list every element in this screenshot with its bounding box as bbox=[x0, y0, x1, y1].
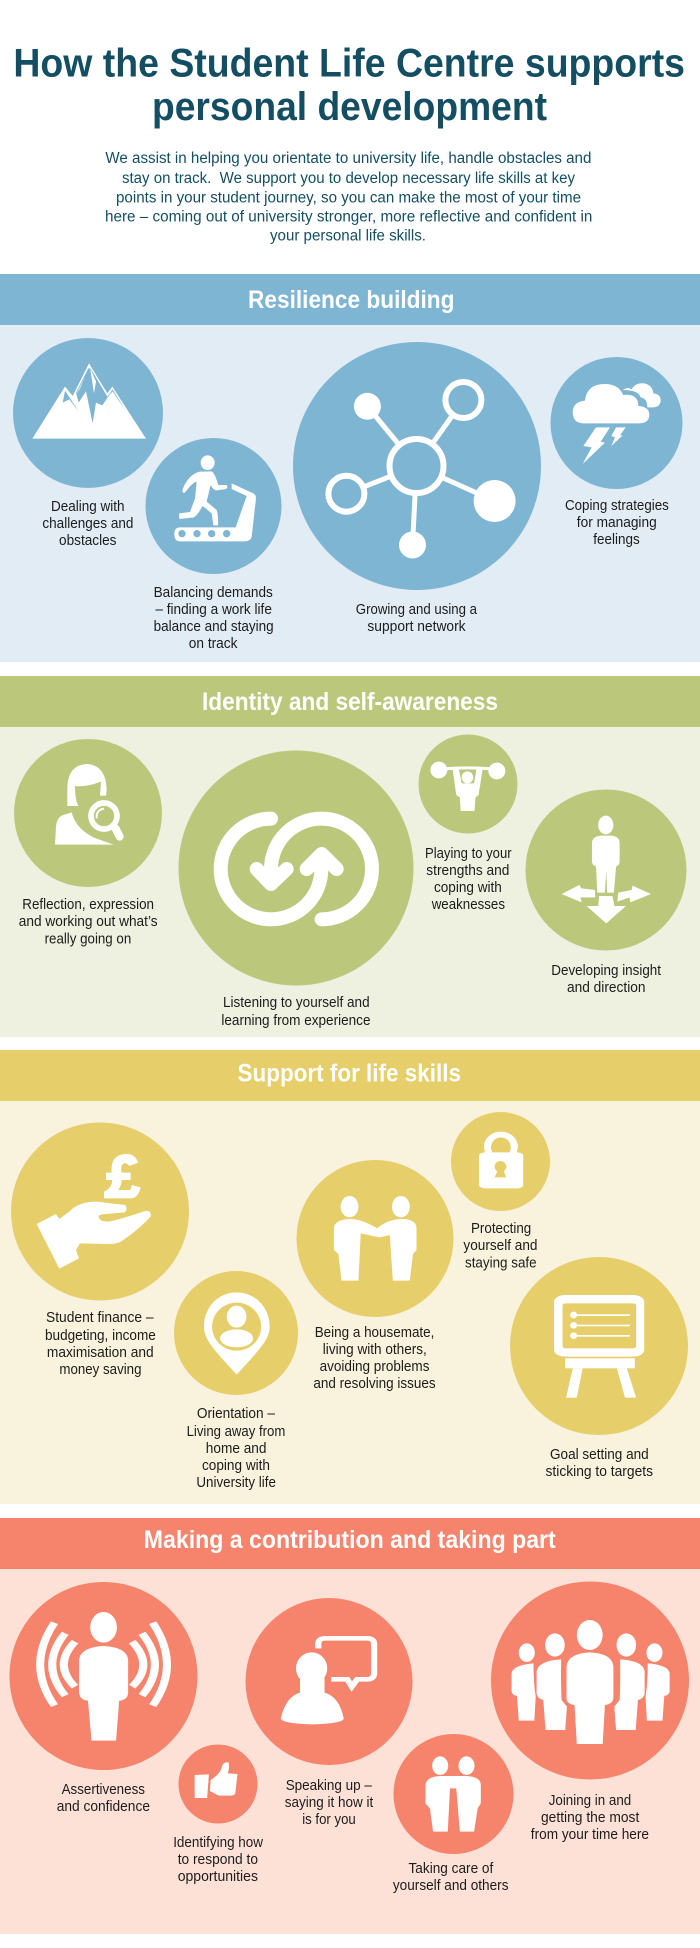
label: student finance bbox=[45, 1310, 156, 1378]
heading: making a contribution bbox=[0, 1518, 700, 1569]
item: joining in bbox=[491, 1582, 689, 1843]
label: orientation: Living away from bbox=[187, 1424, 285, 1440]
heading: support for life skills bbox=[0, 1050, 700, 1101]
label: orientation: home and bbox=[206, 1441, 266, 1457]
icon: treadmill bbox=[146, 438, 282, 574]
label: speaking up: Speaking up – bbox=[286, 1778, 373, 1794]
label: reflection bbox=[19, 897, 158, 948]
intro text bbox=[105, 150, 592, 244]
label: protecting yourself: Protecting bbox=[471, 1221, 531, 1237]
label: strengths bbox=[425, 846, 512, 913]
label: joining in: from your time here bbox=[531, 1827, 649, 1843]
icon: location pin bbox=[174, 1271, 298, 1395]
icon: person with direction arrows bbox=[526, 790, 686, 950]
title bbox=[13, 42, 685, 129]
label: housemate: living with others, bbox=[323, 1342, 427, 1358]
item: student finance bbox=[11, 1122, 189, 1378]
icon: two people bbox=[394, 1734, 514, 1854]
label: coping strategies bbox=[565, 498, 669, 548]
label: assertiveness bbox=[57, 1782, 150, 1815]
label: assertiveness: and confidence bbox=[57, 1799, 150, 1815]
heading: resilience building: Resilience building bbox=[248, 286, 454, 314]
intro text: We assist in helping you orientate to university life, handle obstacles and bbox=[105, 150, 591, 167]
label: support network: Growing and using a bbox=[356, 602, 478, 618]
heading: making a contribution: Making a contribution and taking part bbox=[144, 1526, 556, 1554]
label: housemate: and resolving issues bbox=[313, 1376, 436, 1392]
heading: identity and self-awareness bbox=[0, 676, 700, 727]
icon: two people linked bbox=[296, 1160, 454, 1317]
label: housemate bbox=[313, 1325, 436, 1392]
heading: identity and self-awareness: Identity and self-awareness bbox=[202, 688, 498, 716]
icon: woman with magnifier bbox=[14, 739, 162, 887]
icon: network bbox=[293, 342, 541, 590]
intro text: here – coming out of university stronger, more reflective and confident in bbox=[105, 208, 592, 226]
label: taking care: Taking care of bbox=[408, 1861, 494, 1877]
label: speaking up bbox=[285, 1778, 373, 1828]
label: student finance: budgeting, income bbox=[45, 1328, 156, 1344]
label: listening to yourself: learning from experience bbox=[221, 1013, 370, 1029]
label: support network: support network bbox=[367, 619, 466, 635]
intro text: stay on track. We support you to develop necessary life skills at key bbox=[122, 170, 575, 187]
label: goal setting bbox=[546, 1447, 653, 1480]
label: strengths: weaknesses bbox=[431, 897, 505, 913]
label: reflection: really going on bbox=[45, 932, 131, 948]
label: joining in: Joining in and bbox=[549, 1793, 631, 1809]
label: opportunities: opportunities bbox=[178, 1869, 258, 1885]
panel: identity and self-awareness bbox=[0, 676, 700, 1037]
panel: making a contribution and taking part bbox=[0, 1518, 700, 1934]
label: reflection: and working out what’s bbox=[19, 914, 158, 930]
intro text: your personal life skills. bbox=[270, 228, 426, 244]
label: dealing with challenges: obstacles bbox=[59, 533, 116, 549]
label: student finance: maximisation and bbox=[47, 1345, 154, 1361]
label: taking care bbox=[393, 1861, 508, 1894]
icon: person with sound waves bbox=[10, 1582, 198, 1770]
label: orientation: Orientation – bbox=[197, 1406, 276, 1422]
label: orientation: coping with bbox=[202, 1458, 270, 1474]
item: dealing with challenges bbox=[13, 338, 163, 549]
icon: hand with pound sign bbox=[11, 1122, 189, 1300]
item: orientation bbox=[174, 1271, 298, 1491]
label: dealing with challenges: challenges and bbox=[42, 516, 133, 532]
label: coping strategies: Coping strategies bbox=[565, 498, 669, 514]
label: protecting yourself: staying safe bbox=[465, 1256, 537, 1272]
label: insight and direction: and direction bbox=[567, 980, 646, 996]
label: balancing demands: balance and staying bbox=[154, 619, 274, 635]
label: goal setting: sticking to targets bbox=[546, 1464, 653, 1480]
label: strengths: Playing to your bbox=[425, 846, 512, 862]
label: speaking up: is for you bbox=[302, 1812, 356, 1828]
icon: storm cloud bbox=[550, 357, 682, 489]
item: reflection bbox=[14, 739, 162, 948]
icon: easel board bbox=[510, 1257, 688, 1435]
title: personal development bbox=[152, 85, 547, 129]
heading: resilience building bbox=[0, 274, 700, 325]
panel: resilience building bbox=[0, 274, 700, 662]
icon: padlock bbox=[451, 1112, 550, 1211]
icon: weightlifter bbox=[418, 734, 518, 834]
item: housemate bbox=[296, 1160, 454, 1392]
item: support network bbox=[293, 342, 541, 635]
label: balancing demands: Balancing demands bbox=[154, 585, 273, 601]
label: protecting yourself bbox=[463, 1221, 538, 1272]
label: opportunities: to respond to bbox=[178, 1852, 258, 1868]
label: joining in bbox=[531, 1793, 649, 1843]
icon: group of people bbox=[491, 1582, 689, 1780]
icon: person with speech bubble bbox=[246, 1598, 412, 1765]
item: protecting yourself bbox=[451, 1112, 550, 1272]
label: joining in: getting the most bbox=[541, 1810, 639, 1826]
icon: thumbs up bbox=[178, 1744, 258, 1824]
item: insight and direction bbox=[526, 790, 686, 996]
label: speaking up: saying it how it bbox=[285, 1795, 373, 1811]
item: assertiveness bbox=[10, 1582, 198, 1815]
label: insight and direction: Developing insight bbox=[551, 963, 661, 979]
label: reflection: Reflection, expression bbox=[22, 897, 154, 913]
label: goal setting: Goal setting and bbox=[550, 1447, 649, 1463]
heading: support for life skills: Support for life skills bbox=[238, 1060, 461, 1088]
icon: mountain bbox=[13, 338, 163, 488]
label: orientation: University life bbox=[196, 1475, 276, 1491]
label: support network bbox=[356, 602, 478, 635]
label: student finance: Student finance – bbox=[46, 1310, 154, 1326]
label: listening to yourself bbox=[221, 995, 370, 1029]
label: taking care: yourself and others bbox=[393, 1878, 508, 1894]
label: balancing demands: – finding a work life bbox=[155, 602, 272, 618]
item: coping strategies bbox=[550, 357, 682, 548]
item: strengths bbox=[418, 734, 518, 913]
label: dealing with challenges bbox=[42, 499, 133, 549]
icon: cycle arrows bbox=[178, 750, 414, 986]
item: goal setting bbox=[510, 1257, 688, 1480]
label: balancing demands: on track bbox=[189, 636, 238, 652]
panel: support for life skills bbox=[0, 1050, 700, 1504]
label: housemate: Being a housemate, bbox=[315, 1325, 434, 1341]
label: orientation bbox=[187, 1406, 285, 1491]
label: strengths: strengths and bbox=[426, 863, 509, 879]
label: coping strategies: for managing bbox=[577, 515, 657, 531]
label: insight and direction bbox=[551, 963, 661, 996]
label: opportunities: Identifying how bbox=[173, 1835, 263, 1851]
label: student finance: money saving bbox=[59, 1362, 142, 1378]
label: dealing with challenges: Dealing with bbox=[51, 499, 124, 515]
label: strengths: coping with bbox=[434, 880, 502, 896]
label: assertiveness: Assertiveness bbox=[62, 1782, 145, 1798]
item: taking care bbox=[393, 1734, 514, 1894]
label: listening to yourself: Listening to yourself and bbox=[223, 995, 370, 1011]
intro text: points in your student journey, so you can make the most of your time bbox=[116, 190, 581, 206]
label: housemate: avoiding problems bbox=[320, 1359, 430, 1375]
label: opportunities bbox=[173, 1835, 263, 1885]
label: balancing demands bbox=[154, 585, 274, 652]
item: speaking up bbox=[246, 1598, 412, 1828]
item: opportunities bbox=[173, 1744, 263, 1885]
label: coping strategies: feelings bbox=[593, 532, 640, 548]
item: listening to yourself bbox=[178, 750, 414, 1029]
label: protecting yourself: yourself and bbox=[463, 1238, 538, 1254]
item: balancing demands bbox=[146, 438, 282, 652]
